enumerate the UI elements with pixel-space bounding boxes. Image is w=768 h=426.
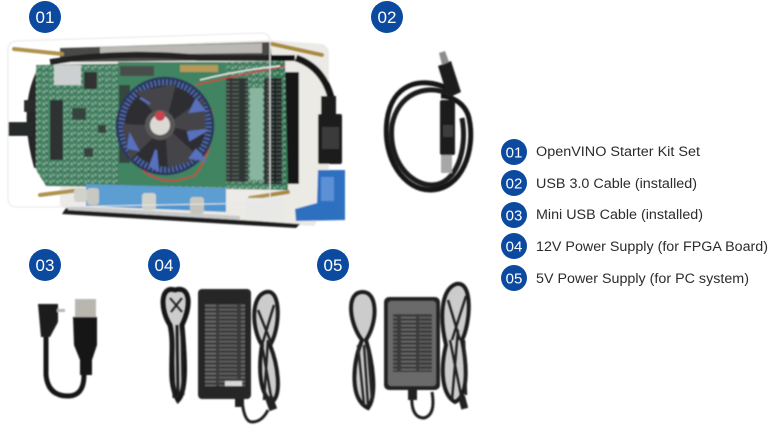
legend item 04: 12V Power Supply (for FPGA Board) — [536, 239, 768, 254]
badge 02 — [371, 1, 403, 33]
top connectors — [120, 66, 154, 76]
badge 02: 02 — [378, 8, 396, 27]
adapter body — [384, 297, 440, 390]
legend item 04 — [501, 233, 768, 259]
legend item 01: 01 — [506, 144, 522, 162]
fan hub — [145, 110, 175, 140]
right DC cord coil — [442, 284, 469, 402]
legend item 02 — [501, 170, 697, 196]
product: 12V power supply — [163, 289, 278, 422]
USB-A plug body — [73, 317, 97, 375]
adapter tail loop — [412, 392, 433, 418]
wires — [195, 66, 285, 85]
blue bracket rail — [86, 184, 226, 212]
legend item 05: 05 — [506, 270, 522, 288]
cable — [46, 335, 84, 396]
legend item 02: USB 3.0 Cable (installed) — [536, 176, 697, 191]
legend item 01 — [501, 139, 700, 165]
left power cord coil — [163, 289, 188, 400]
top plug — [438, 61, 461, 98]
product: Mini USB cable — [38, 299, 97, 396]
bottom black plate — [62, 208, 300, 228]
angled mini plug — [38, 304, 58, 337]
header sockets — [226, 78, 248, 182]
fan blades — [122, 84, 206, 168]
green PCB solid area — [118, 62, 226, 187]
cable loop — [386, 83, 471, 190]
lower plug — [440, 100, 455, 155]
capacitors — [74, 188, 87, 202]
white block — [245, 198, 285, 220]
adapter label — [393, 314, 432, 372]
top dark band — [60, 42, 272, 62]
blue USB connector — [295, 170, 345, 221]
product: 5V power supply — [351, 284, 469, 418]
left power cord coil — [351, 292, 375, 408]
badge 01 — [29, 1, 61, 33]
legend item 05: 5V Power Supply (for PC system) — [536, 271, 749, 286]
legend item 03: 03 — [506, 208, 522, 224]
back plate — [60, 40, 329, 226]
badge 05: 05 — [324, 256, 342, 275]
USB-A plug metal — [75, 299, 96, 317]
adapter body — [198, 289, 251, 399]
badge 04: 04 — [155, 256, 173, 275]
legend item 05 — [501, 265, 749, 291]
adapter label — [205, 304, 245, 386]
legend item 01: OpenVINO Starter Kit Set — [536, 144, 700, 159]
cooling fan — [117, 78, 213, 174]
cable on right — [296, 58, 332, 102]
badge 04 — [148, 249, 180, 281]
legend item 04: 04 — [506, 238, 522, 256]
clear acrylic plate — [8, 33, 270, 207]
product: OpenVINO Starter Kit Set — [8, 33, 345, 228]
fan blue accents — [128, 98, 207, 170]
green PCB — [36, 61, 288, 190]
badge 03: 03 — [36, 256, 54, 275]
left chips — [50, 100, 63, 160]
top cable — [50, 55, 295, 62]
badge 03 — [29, 249, 61, 281]
brass standoffs — [14, 44, 322, 198]
right inner slot — [285, 72, 299, 184]
left dark edge — [26, 72, 48, 168]
badge 01: 01 — [36, 8, 54, 27]
legend item 02: 02 — [506, 176, 522, 192]
legend item 03: Mini USB Cable (installed) — [536, 207, 703, 222]
legend — [501, 139, 768, 291]
legend item 03 — [501, 202, 703, 228]
right DC cord coil — [254, 292, 278, 402]
product: USB 3.0 cable — [386, 51, 471, 190]
white display block — [54, 65, 81, 85]
badge 05 — [317, 249, 349, 281]
adapter tail — [235, 399, 244, 407]
